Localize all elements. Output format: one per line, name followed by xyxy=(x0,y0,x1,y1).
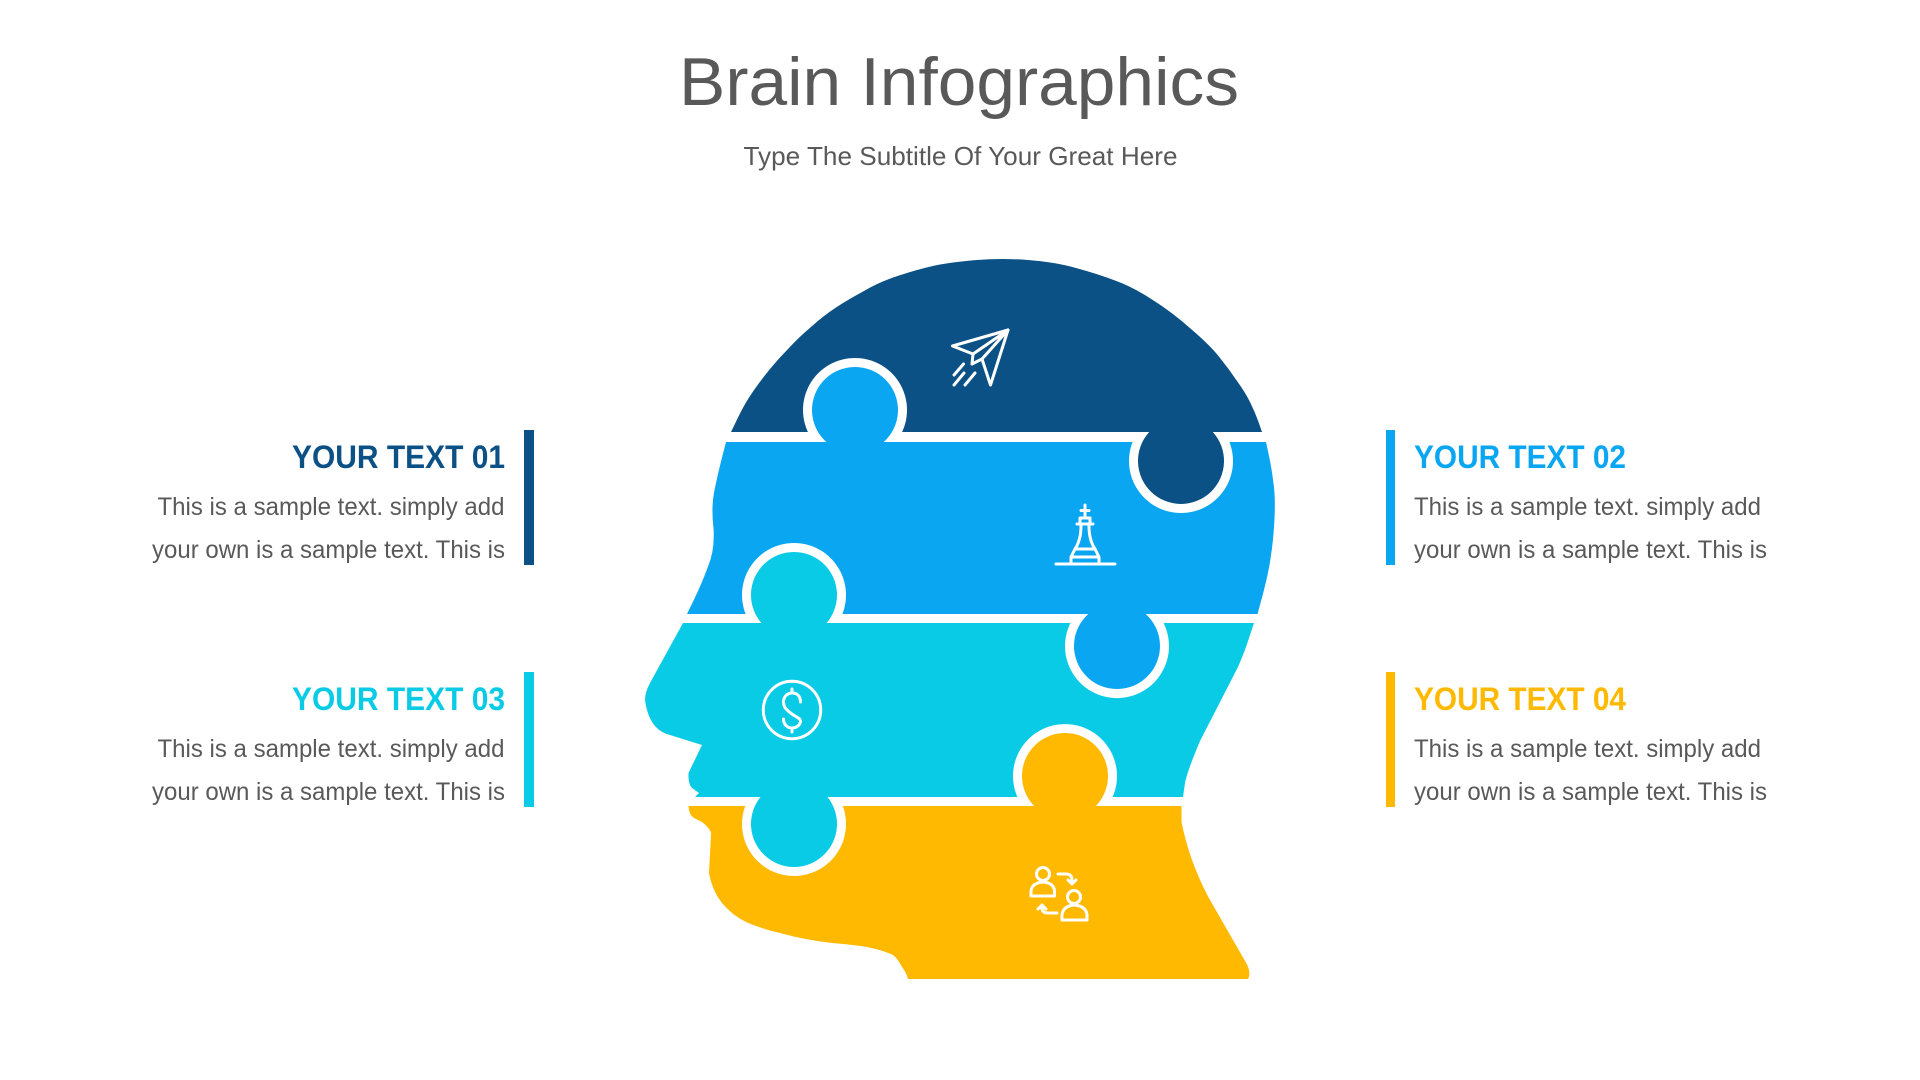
heading 04: YOUR TEXT 04 xyxy=(1414,681,1626,717)
body text 04: This is a sample text. simply add xyxy=(1414,735,1761,763)
heading 01: YOUR TEXT 01 xyxy=(292,439,505,475)
panel: text block 03 xyxy=(152,672,534,807)
body text 03: This is a sample text. simply add xyxy=(158,735,504,763)
panel: text block 02 xyxy=(1386,430,1767,565)
heading 02: YOUR TEXT 02 xyxy=(1414,439,1626,475)
body text 02: your own is a sample text. This is xyxy=(1414,536,1767,564)
body text 04: your own is a sample text. This is xyxy=(1414,778,1767,806)
accent bar 02 xyxy=(1386,430,1395,565)
puzzle piece: forehead band xyxy=(687,367,1275,689)
puzzle piece: jaw band xyxy=(688,733,1249,979)
chart: puzzle head xyxy=(645,259,1275,979)
accent bar 04 xyxy=(1386,672,1395,807)
body text 03: your own is a sample text. This is xyxy=(152,778,505,806)
body text 02: This is a sample text. simply add xyxy=(1414,493,1761,521)
panel: text block 04 xyxy=(1386,672,1767,807)
accent bar 03 xyxy=(524,672,534,807)
subtitle: Type The Subtitle Of Your Great Here xyxy=(744,141,1178,171)
icon: dollar coin xyxy=(763,681,821,739)
body text 04 xyxy=(1414,735,1767,806)
heading 03: YOUR TEXT 03 xyxy=(292,681,505,717)
icon: paper plane xyxy=(952,330,1008,385)
title: Brain Infographics xyxy=(679,44,1239,120)
body text 01: your own is a sample text. This is xyxy=(152,536,505,564)
puzzle piece: crown of head xyxy=(731,259,1262,504)
body text 01 xyxy=(152,493,505,564)
panel: text block 01 xyxy=(152,430,534,565)
body text 02 xyxy=(1414,493,1767,564)
accent bar 01 xyxy=(524,430,534,565)
icon: chess king xyxy=(1056,505,1115,564)
icon: people exchange xyxy=(1031,868,1087,920)
body text 01: This is a sample text. simply add xyxy=(158,493,504,521)
puzzle piece: nose band xyxy=(645,552,1254,867)
body text 03 xyxy=(152,735,505,806)
